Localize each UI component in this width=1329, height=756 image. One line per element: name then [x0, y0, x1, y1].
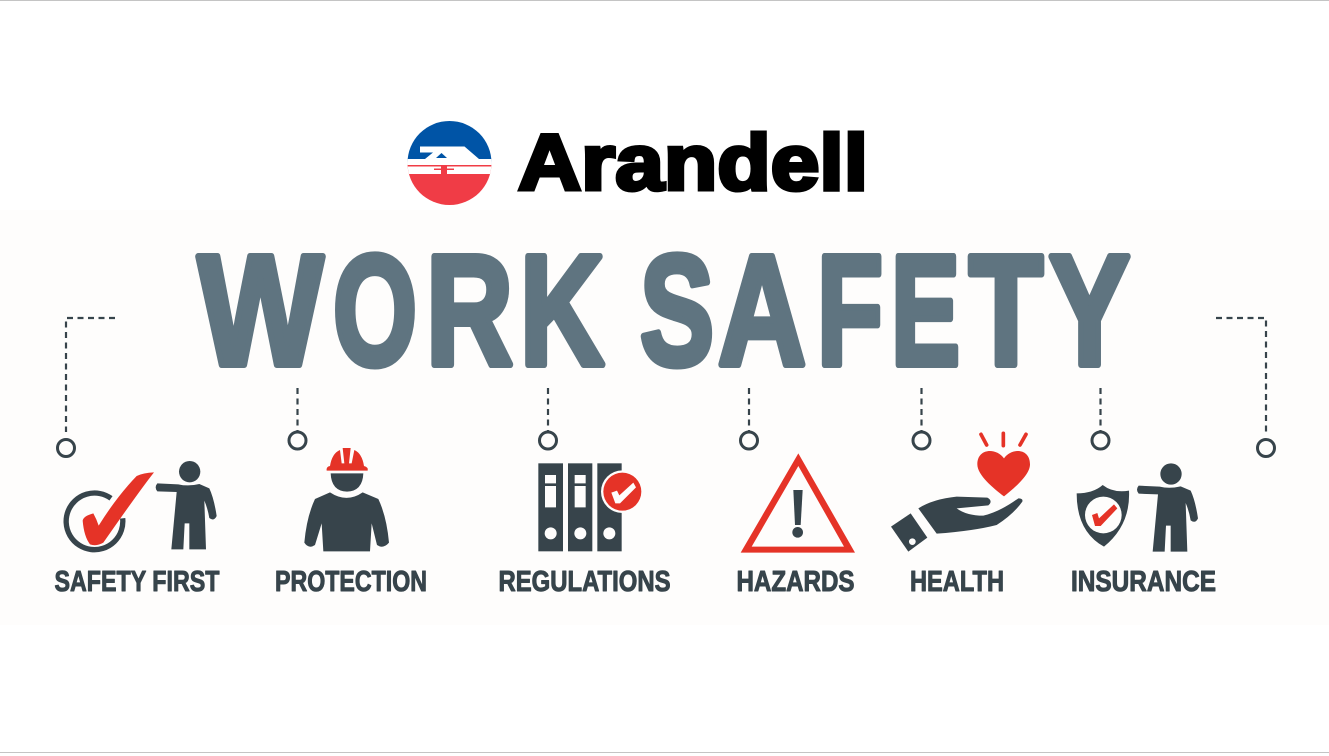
title: WORK SAFETY: O [333, 224, 417, 398]
icon: hazard warning triangle [741, 453, 855, 553]
title: WORK SAFETY: R [426, 224, 513, 398]
connector: health [913, 388, 930, 449]
logo emblem [408, 121, 492, 205]
title: WORK SAFETY [198, 224, 1130, 398]
label: REGULATIONS: REGULATIONS [498, 566, 670, 598]
icon: regulations binders with check badge [538, 463, 644, 551]
title: WORK SAFETY: A [718, 224, 806, 398]
title: WORK SAFETY: S [640, 224, 714, 398]
label: INSURANCE: INSURANCE [1071, 566, 1216, 598]
title: WORK SAFETY: F [817, 224, 883, 398]
label: HAZARDS: HAZARDS [736, 566, 854, 598]
icon: health hand holding heart [891, 433, 1030, 552]
icon: protection worker with helmet [304, 448, 389, 551]
label: PROTECTION: PROTECTION [275, 566, 427, 598]
icon: insurance shield and person [1077, 463, 1198, 552]
title: WORK SAFETY: E [891, 224, 960, 398]
connector: right bracket [1216, 318, 1274, 456]
label: HEALTH: HEALTH [910, 566, 1004, 598]
label: SAFETY FIRST: SAFETY FIRST [54, 566, 220, 598]
connector: insurance [1092, 388, 1109, 449]
logo: Arandell [400, 118, 868, 206]
labels [54, 566, 1216, 598]
connector: regulations [540, 388, 556, 449]
logo wordmark: Arandell [518, 118, 868, 206]
connector: left bracket [58, 318, 115, 456]
icon: safety first check and person [66, 461, 217, 550]
connector: protection [289, 388, 306, 449]
title: WORK SAFETY: Y [1049, 224, 1130, 398]
connector: hazards [740, 388, 758, 449]
title: WORK SAFETY: W [198, 224, 324, 398]
title: WORK SAFETY: K [520, 224, 604, 398]
title: WORK SAFETY: T [969, 224, 1043, 398]
